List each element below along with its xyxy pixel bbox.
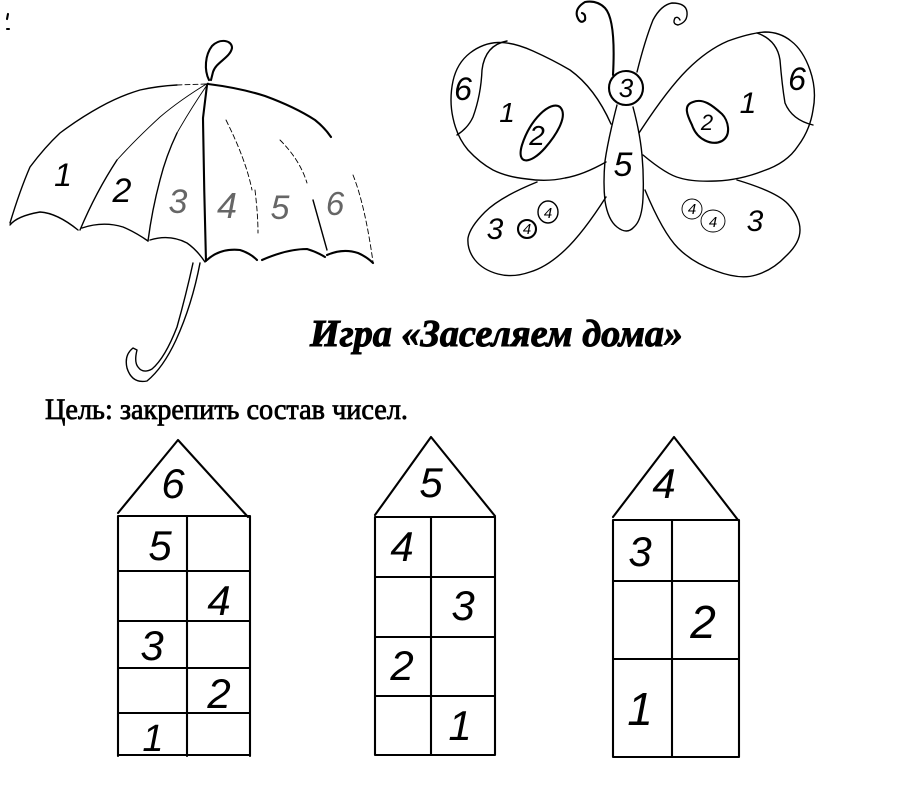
house: number 5: 4 (390, 523, 414, 570)
butterfly numbers: 3 (747, 205, 764, 238)
house: number 5: 5 (419, 459, 443, 506)
butterfly numbers: 4 (523, 221, 531, 238)
house: number 4: 1 (627, 683, 653, 735)
house: number 5: 3 (451, 582, 475, 629)
butterfly numbers: 3 (619, 73, 634, 103)
butterfly numbers: 6 (788, 61, 806, 97)
umbrella numbers: 5 (271, 189, 290, 227)
house: number 5: 2 (389, 642, 414, 689)
butterfly numbers (454, 61, 806, 246)
house: number 4 (613, 437, 739, 757)
butterfly numbers: 2 (528, 120, 545, 151)
house: number 6 (118, 440, 250, 760)
title: Игра «Заселяем дома» (309, 313, 683, 355)
house: number 4: 4 (652, 460, 676, 507)
umbrella numbers: 1 (54, 157, 72, 193)
butterfly numbers: 1 (740, 87, 756, 120)
umbrella numbers (54, 157, 345, 227)
umbrella numbers: 2 (112, 172, 132, 210)
house: number 4: 3 (628, 528, 652, 575)
butterfly numbers: 4 (709, 214, 717, 231)
icon: umbrella (10, 41, 373, 381)
house: number 6: 5 (148, 522, 172, 569)
butterfly numbers: 4 (688, 201, 696, 218)
butterfly numbers: 4 (544, 205, 552, 222)
butterfly numbers: 2 (700, 110, 713, 135)
house: number 6: 2 (206, 670, 231, 717)
house: number 5 (375, 437, 495, 755)
umbrella numbers: 4 (217, 185, 237, 226)
butterfly numbers: 1 (499, 97, 515, 128)
umbrella numbers: 3 (169, 183, 188, 221)
umbrella numbers: 6 (326, 185, 345, 222)
butterfly numbers: 5 (614, 146, 633, 184)
house: number 5: 1 (448, 702, 472, 749)
butterfly numbers: 3 (487, 213, 504, 246)
icon: butterfly (451, 2, 814, 277)
house: number 4: 2 (689, 596, 716, 648)
butterfly numbers: 6 (454, 71, 472, 107)
goal text: Цель: закрепить состав чисел. (45, 393, 408, 426)
house: number 6: 1 (142, 718, 164, 760)
house: number 6: 6 (161, 460, 185, 507)
house: number 6: 3 (140, 622, 164, 669)
house: number 6: 4 (207, 577, 231, 624)
